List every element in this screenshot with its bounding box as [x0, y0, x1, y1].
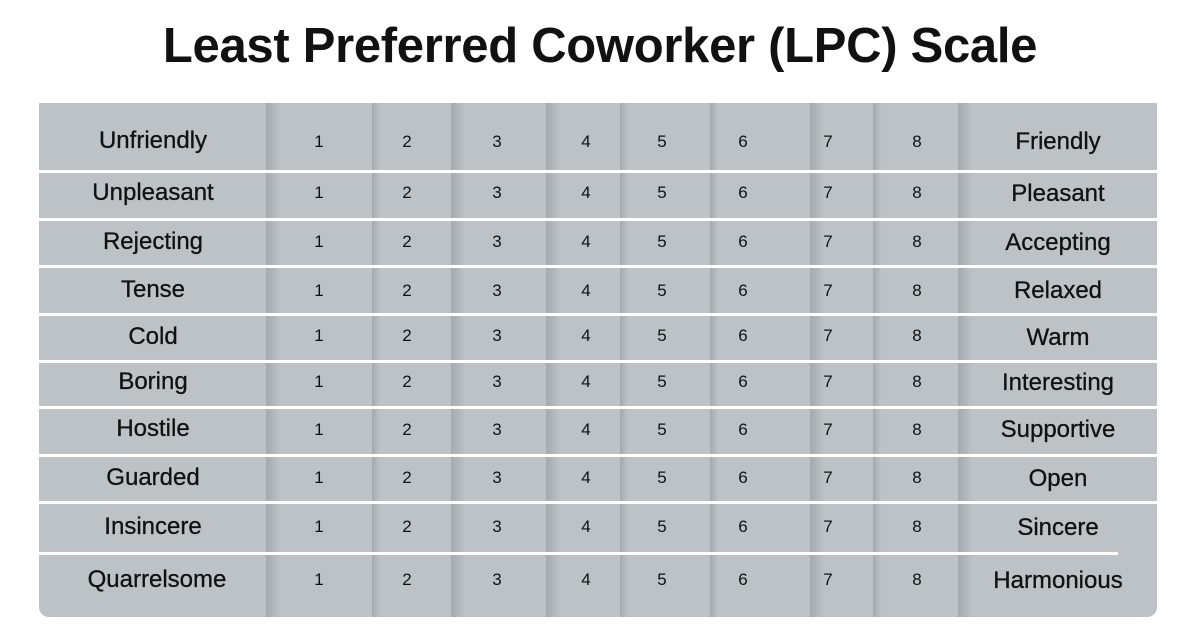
numbers: 4 — [581, 420, 591, 439]
numbers: 3 — [492, 468, 502, 487]
table text: Relaxed — [1014, 277, 1102, 304]
numbers: 6 — [738, 183, 748, 202]
numbers: 8 — [912, 281, 922, 300]
numbers: 4 — [581, 132, 591, 151]
numbers: 6 — [738, 517, 748, 536]
numbers: 6 — [738, 326, 748, 345]
numbers: 2 — [402, 326, 412, 345]
table text: Insincere — [104, 513, 202, 540]
numbers: 5 — [657, 281, 667, 300]
numbers: 4 — [581, 517, 591, 536]
numbers: 6 — [738, 281, 748, 300]
numbers: 6 — [738, 372, 748, 391]
numbers: 7 — [823, 420, 833, 439]
numbers: 3 — [492, 326, 502, 345]
table text: Tense — [121, 276, 185, 303]
numbers: 1 — [314, 326, 324, 345]
numbers: 7 — [823, 517, 833, 536]
numbers: 7 — [823, 372, 833, 391]
numbers: 7 — [823, 326, 833, 345]
numbers: 8 — [912, 570, 922, 589]
numbers: 4 — [581, 468, 591, 487]
numbers: 5 — [657, 570, 667, 589]
numbers: 4 — [581, 326, 591, 345]
table text: Hostile — [116, 415, 190, 442]
numbers: 2 — [402, 517, 412, 536]
table text: Guarded — [106, 464, 200, 491]
table text: Harmonious — [993, 567, 1123, 594]
numbers: 3 — [492, 232, 502, 251]
numbers: 8 — [912, 232, 922, 251]
numbers: 6 — [738, 468, 748, 487]
numbers: 1 — [314, 281, 324, 300]
numbers: 8 — [912, 132, 922, 151]
numbers: 7 — [823, 570, 833, 589]
numbers: 3 — [492, 281, 502, 300]
table text: Supportive — [1001, 416, 1115, 443]
numbers: 5 — [657, 132, 667, 151]
numbers: 2 — [402, 281, 412, 300]
numbers: 1 — [314, 232, 324, 251]
numbers: 4 — [581, 570, 591, 589]
numbers: 5 — [657, 517, 667, 536]
table text: Friendly — [1015, 128, 1101, 155]
numbers: 1 — [314, 372, 324, 391]
numbers: 6 — [738, 570, 748, 589]
table text: Open — [1029, 465, 1087, 492]
numbers: 1 — [314, 420, 324, 439]
numbers: 6 — [738, 420, 748, 439]
numbers: 5 — [657, 232, 667, 251]
table text: Quarrelsome — [88, 566, 226, 593]
numbers: 5 — [657, 372, 667, 391]
numbers: 8 — [912, 372, 922, 391]
numbers: 4 — [581, 372, 591, 391]
numbers: 6 — [738, 232, 748, 251]
numbers: 2 — [402, 183, 412, 202]
numbers: 1 — [314, 517, 324, 536]
numbers: 7 — [823, 183, 833, 202]
numbers: 3 — [492, 570, 502, 589]
numbers: 2 — [402, 570, 412, 589]
numbers: 1 — [314, 132, 324, 151]
numbers: 2 — [402, 420, 412, 439]
numbers: 8 — [912, 183, 922, 202]
numbers: 5 — [657, 420, 667, 439]
numbers: 4 — [581, 281, 591, 300]
numbers: 3 — [492, 420, 502, 439]
numbers: 8 — [912, 420, 922, 439]
numbers: 3 — [492, 132, 502, 151]
table — [39, 103, 1157, 617]
numbers: 2 — [402, 232, 412, 251]
numbers: 7 — [823, 232, 833, 251]
numbers: 2 — [402, 468, 412, 487]
table text: Warm — [1026, 324, 1090, 351]
numbers: 5 — [657, 468, 667, 487]
table text: Unpleasant — [92, 179, 214, 206]
table text: Boring — [118, 368, 188, 395]
numbers: 4 — [581, 232, 591, 251]
table text: Accepting — [1005, 229, 1111, 256]
numbers: 1 — [314, 183, 324, 202]
numbers: 2 — [402, 372, 412, 391]
numbers: 5 — [657, 326, 667, 345]
numbers: 8 — [912, 517, 922, 536]
numbers: 4 — [581, 183, 591, 202]
numbers: 3 — [492, 372, 502, 391]
numbers: 7 — [823, 132, 833, 151]
numbers: 7 — [823, 468, 833, 487]
numbers: 2 — [402, 132, 412, 151]
numbers: 5 — [657, 183, 667, 202]
numbers: 8 — [912, 468, 922, 487]
table text: Interesting — [1002, 369, 1114, 396]
numbers: 3 — [492, 183, 502, 202]
table text: Cold — [128, 323, 178, 350]
numbers: 3 — [492, 517, 502, 536]
table text: Unfriendly — [99, 127, 207, 154]
numbers: 6 — [738, 132, 748, 151]
table text: Pleasant — [1011, 180, 1105, 207]
numbers: 1 — [314, 570, 324, 589]
numbers: 1 — [314, 468, 324, 487]
numbers: 8 — [912, 326, 922, 345]
title: Least Preferred Coworker (LPC) Scale — [163, 19, 1037, 73]
table text: Rejecting — [103, 228, 203, 255]
numbers: 7 — [823, 281, 833, 300]
table text: Sincere — [1017, 514, 1099, 541]
